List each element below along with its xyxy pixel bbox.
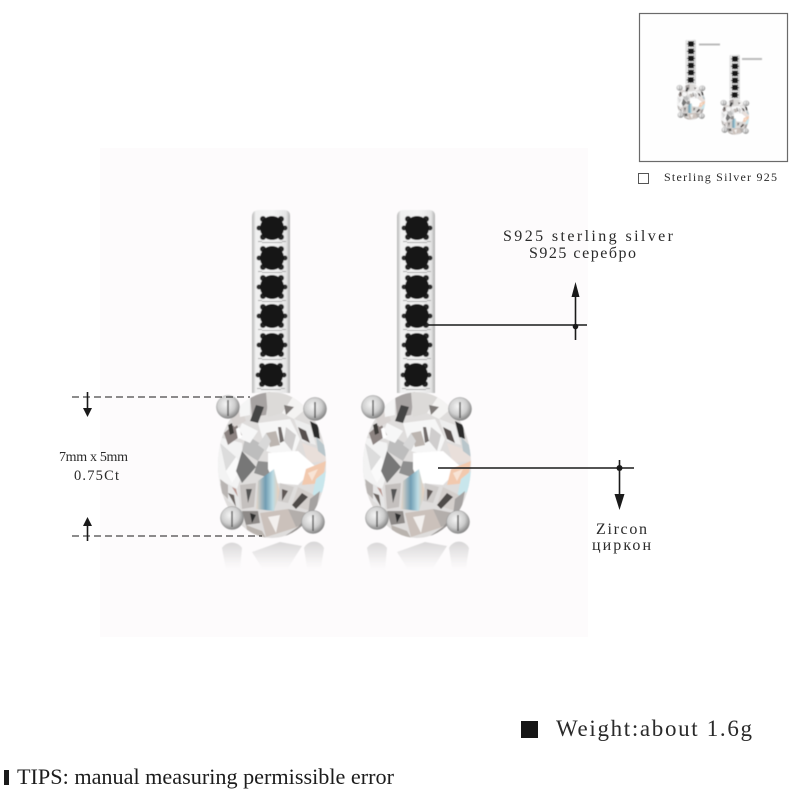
dimension label: 0.75Ct (74, 468, 119, 484)
dimension: bottom guide and arrow (72, 517, 262, 541)
thumbnail earring 2 (721, 55, 762, 135)
weight bullet (521, 721, 538, 738)
arrow: silver leader line (428, 282, 587, 340)
tips text: TIPS: manual measuring permissible error (17, 764, 395, 789)
callout: silver label: S925 серебро (529, 245, 636, 262)
weight text: Weight:about 1.6g (556, 716, 752, 741)
callout: zircon label: циркон (592, 537, 651, 554)
callout: silver label: S925 sterling silver (503, 228, 674, 245)
material checkbox (638, 174, 648, 184)
product photo panel (100, 148, 588, 637)
dimension: top guide and arrow (72, 392, 250, 417)
right earring (362, 210, 472, 538)
right earring reflection (367, 542, 469, 570)
callout: zircon label: Zircon (596, 521, 647, 538)
dimension label: 7mm x 5mm (59, 450, 128, 465)
left earring (216, 210, 326, 538)
arrow: zircon leader line (438, 460, 634, 510)
left earring reflection (222, 542, 324, 570)
callout: zircon label (592, 521, 651, 554)
thumbnail frame (640, 14, 788, 162)
thumbnail earring 1 (677, 40, 720, 120)
tips bullet (4, 770, 9, 785)
callout: silver label (503, 228, 674, 262)
dimension label (59, 450, 128, 484)
material caption: Sterling Silver 925 (664, 170, 777, 184)
